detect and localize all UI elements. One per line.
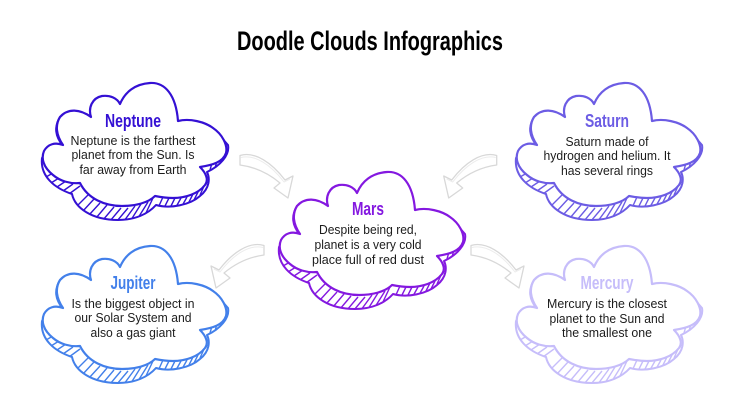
arrow: Mars to Mercury bbox=[471, 245, 524, 288]
text: Neptune description bbox=[70, 134, 196, 177]
text: Jupiter description: also a gas giant bbox=[90, 326, 176, 340]
text: Saturn description: has several rings bbox=[561, 164, 653, 178]
icon: Neptune cloud bbox=[42, 83, 228, 221]
heading: Mercury: Mercury bbox=[580, 273, 634, 293]
text: Mercury description bbox=[547, 297, 668, 340]
arrow: Neptune to Mars bbox=[240, 155, 293, 198]
text: Saturn description bbox=[544, 135, 671, 178]
text: Neptune description: far away from Earth bbox=[80, 163, 187, 177]
text: Neptune description: Neptune is the farthest bbox=[70, 134, 196, 148]
icon: Jupiter cloud bbox=[42, 246, 228, 384]
heading: Jupiter: Jupiter bbox=[110, 273, 156, 293]
arrow: Saturn to Mars bbox=[444, 155, 497, 198]
icon: Saturn cloud bbox=[516, 83, 702, 221]
text: Jupiter description: Is the biggest object in bbox=[72, 297, 195, 311]
arrow: Mars to Jupiter bbox=[211, 245, 264, 288]
title: Doodle Clouds Infographics bbox=[237, 26, 503, 56]
heading: Neptune: Neptune bbox=[105, 111, 161, 131]
text: Mars description: planet is a very cold bbox=[314, 238, 422, 252]
text: Saturn description: hydrogen and helium. It bbox=[544, 149, 671, 163]
panel: Mercury bbox=[516, 246, 702, 384]
text: Mars description bbox=[312, 223, 425, 267]
text: Saturn description: Saturn made of bbox=[566, 135, 649, 149]
icon: Mars cloud bbox=[279, 172, 465, 310]
icon: Mercury cloud bbox=[516, 246, 702, 384]
panel: Jupiter bbox=[42, 246, 228, 384]
heading: Mars: Mars bbox=[352, 199, 384, 219]
text: Mercury description: Mercury is the closest bbox=[547, 297, 668, 311]
text: Mars description: place full of red dust bbox=[312, 253, 425, 267]
panel: Neptune bbox=[42, 83, 228, 221]
text: Mercury description: planet to the Sun and bbox=[550, 312, 665, 326]
panel: Mars bbox=[279, 172, 465, 310]
text: Neptune description: planet from the Sun. Is bbox=[72, 148, 194, 162]
text: Mercury description: the smallest one bbox=[562, 326, 652, 340]
text: Mars description: Despite being red, bbox=[319, 223, 417, 237]
text: Jupiter description bbox=[72, 297, 195, 340]
panel: Saturn bbox=[516, 83, 702, 221]
heading: Saturn: Saturn bbox=[585, 111, 629, 131]
text: Jupiter description: our Solar System and bbox=[74, 311, 192, 325]
